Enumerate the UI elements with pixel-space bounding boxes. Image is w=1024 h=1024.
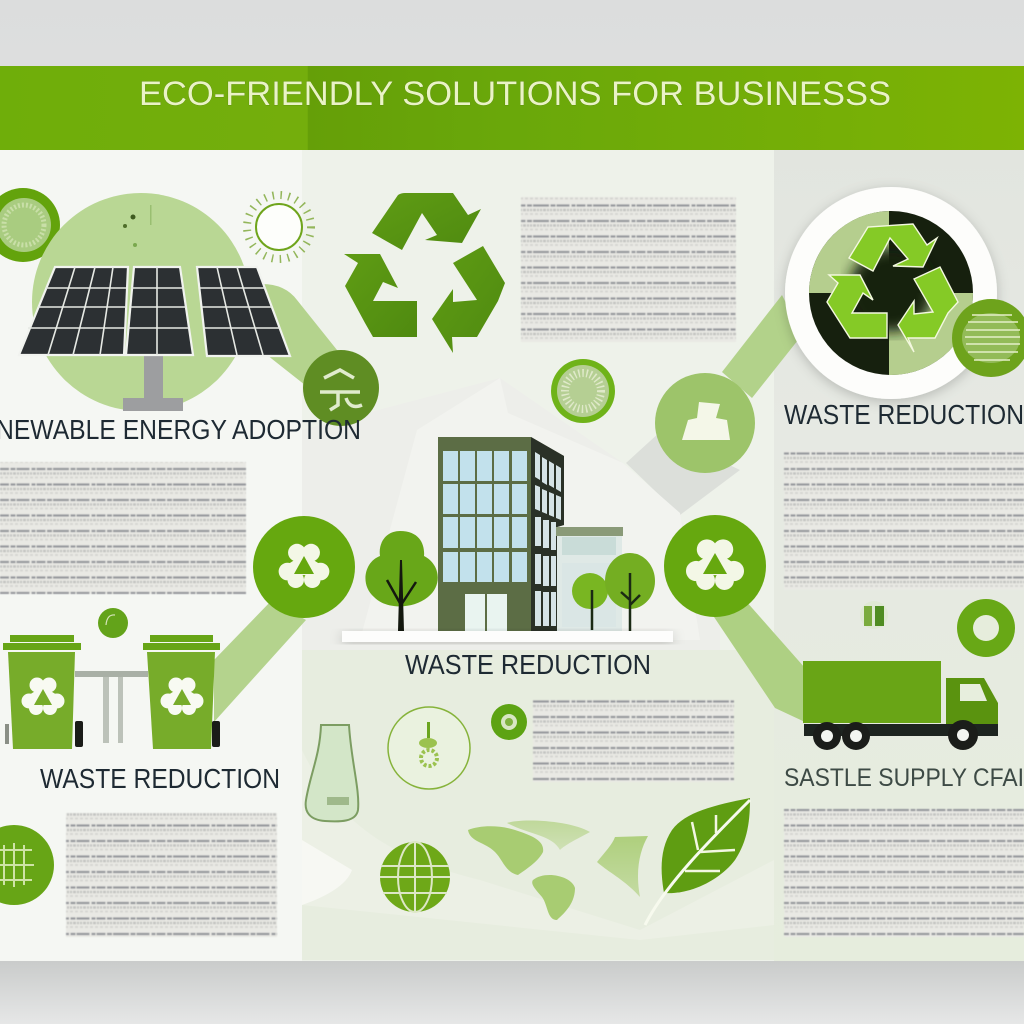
icon: green striped badge <box>952 299 1024 377</box>
icon: small badge <box>491 704 527 740</box>
icon: globe <box>380 842 450 912</box>
tree left <box>365 531 438 631</box>
annex <box>556 527 623 631</box>
icon: green badge top left <box>0 188 60 262</box>
heading: WASTE REDUCTION <box>405 649 651 680</box>
icon: truck <box>803 661 998 750</box>
icon: bin left <box>3 635 83 749</box>
trees right <box>572 553 655 631</box>
main sheet <box>0 150 1024 961</box>
header band <box>0 66 1024 150</box>
connector arm: bottom left <box>214 600 306 722</box>
text block <box>521 197 736 342</box>
ground ledge <box>342 631 673 642</box>
icon: ring badge <box>957 599 1015 657</box>
icon: bottle <box>306 725 358 821</box>
text block <box>66 813 277 937</box>
world map <box>468 820 648 920</box>
solar panels <box>19 267 290 356</box>
connector arm <box>722 295 802 398</box>
panel: centre building <box>342 437 673 680</box>
icon: bin right <box>143 635 220 749</box>
icon: recycle badge left <box>253 516 355 618</box>
panel: supply chain <box>784 599 1024 937</box>
panel: recycling symbol <box>344 193 736 353</box>
text block <box>533 700 734 782</box>
icon: mesh badge <box>551 359 615 423</box>
building <box>438 437 564 632</box>
icon: recycle disc <box>785 187 997 399</box>
icon: olive badge <box>303 350 379 426</box>
illustration backdrop circle <box>32 193 250 411</box>
panel: centre bottom <box>306 700 750 925</box>
heading: WASTE REDUCTION <box>40 763 280 794</box>
text block <box>784 450 1024 590</box>
heading: NEWABLE ENERGY ADOPTION <box>0 414 361 445</box>
panel: waste reduction right <box>551 187 1024 590</box>
text block <box>0 462 246 594</box>
icon: large recycling symbol <box>344 193 505 353</box>
icon: sparkle marks <box>123 205 152 247</box>
icon: outline circle <box>388 707 470 789</box>
title: ECO-FRIENDLY SOLUTIONS FOR BUSINESSS <box>139 75 891 113</box>
small icon <box>860 601 888 629</box>
icon: light green badge <box>655 373 755 473</box>
panel: waste reduction left <box>0 608 280 937</box>
pole <box>123 352 183 411</box>
icon: leaf <box>645 798 750 925</box>
icon: sun <box>247 195 311 259</box>
lower shadow band <box>0 960 1024 1024</box>
bench <box>75 671 148 743</box>
small icon <box>98 608 128 638</box>
text block <box>784 809 1024 937</box>
icon: globe badge <box>0 825 54 905</box>
connector arm: truck <box>708 600 805 722</box>
icon: recycle badge right <box>664 515 766 617</box>
connector arm <box>248 284 337 385</box>
panel: renewable energy <box>0 188 379 594</box>
